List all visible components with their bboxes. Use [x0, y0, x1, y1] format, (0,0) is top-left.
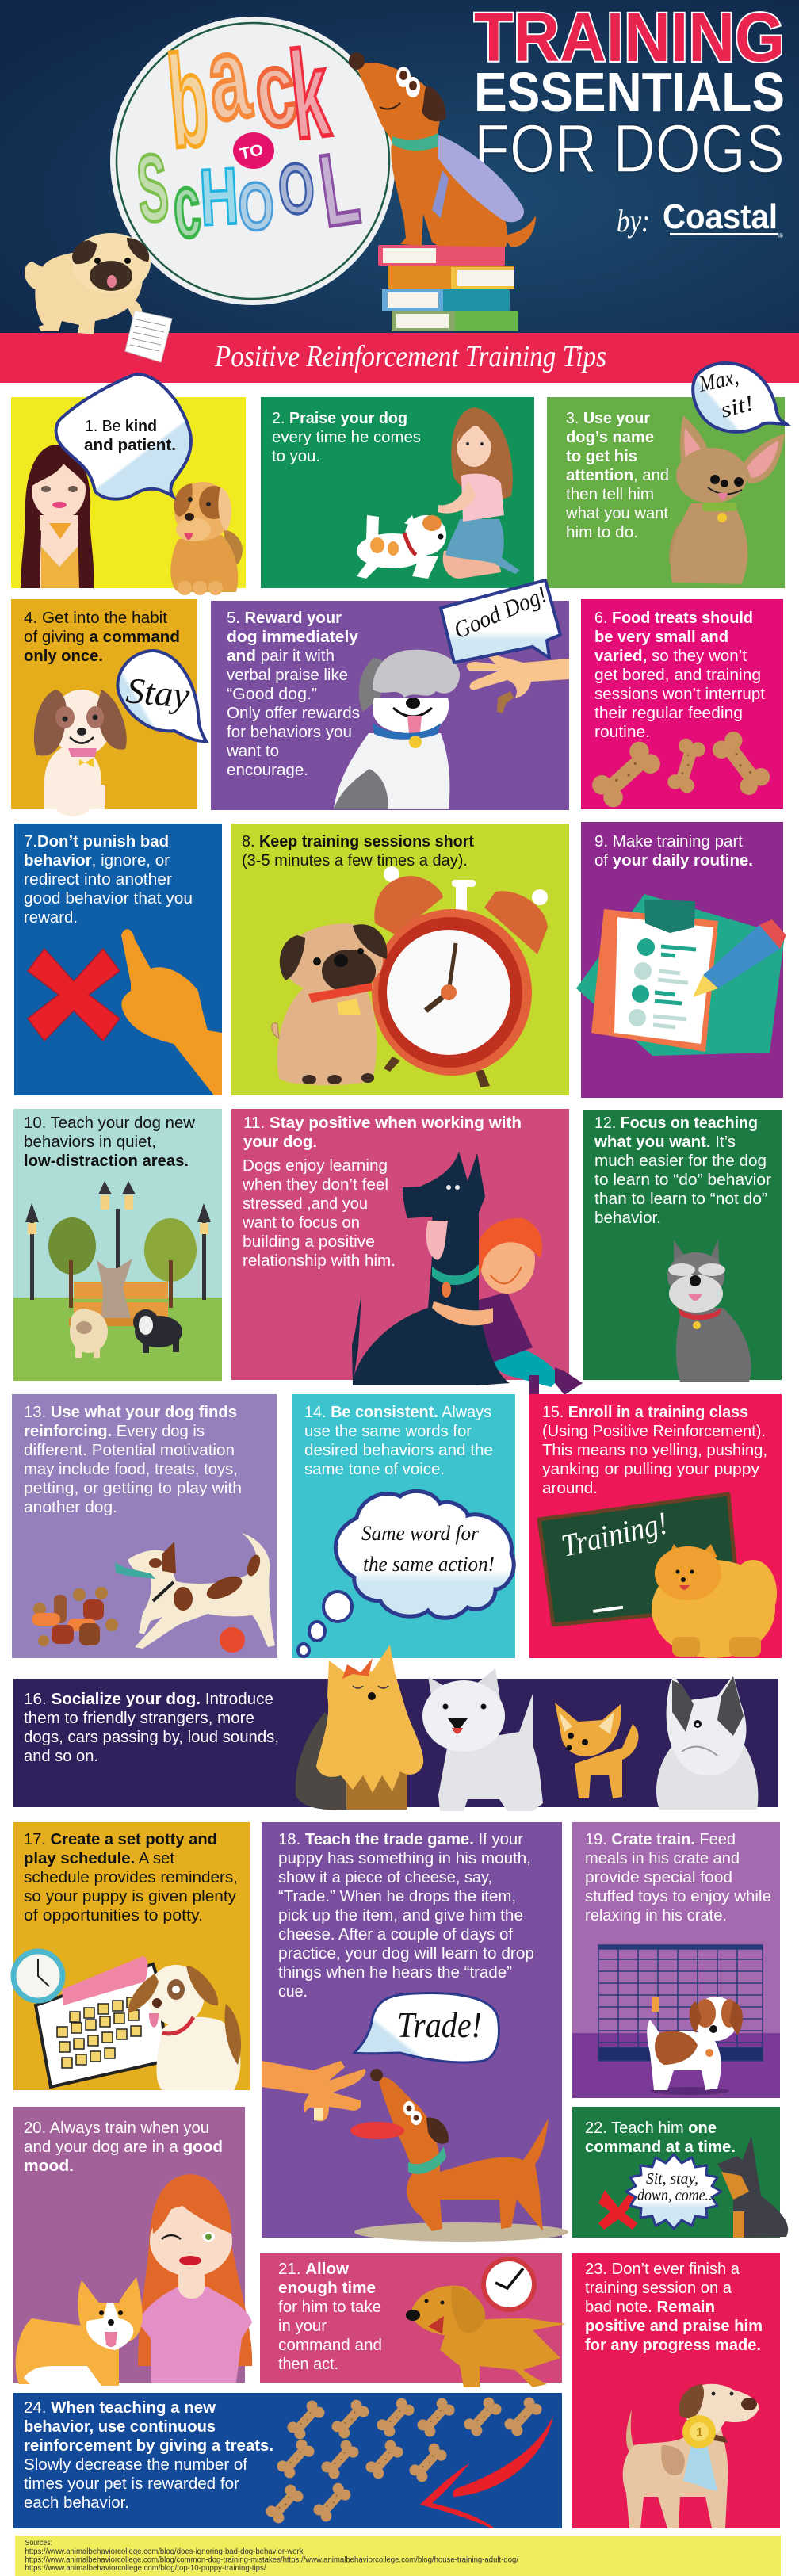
text: (3-5 minutes a few times a day). — [242, 852, 468, 869]
panel: tip 17 — [13, 1822, 250, 2090]
panel: tip 2 — [261, 397, 534, 588]
text — [24, 833, 193, 927]
panel: tip 3 — [547, 363, 786, 588]
starburst bubble — [626, 2154, 721, 2229]
speech bubble — [441, 580, 560, 663]
text: encourage. — [227, 762, 308, 779]
text: of giving a command — [24, 629, 180, 646]
starburst bubble: Sit, stay, — [646, 2170, 698, 2188]
icon: dog bones — [588, 728, 774, 811]
back to school badge: a — [199, 10, 257, 145]
text: 14. Be consistent. Always — [304, 1404, 491, 1421]
illustration: pug with paper — [25, 233, 172, 362]
illustration: girl — [21, 445, 94, 588]
text: times your pet is rewarded for — [24, 2475, 239, 2493]
text — [565, 410, 669, 541]
text: dog immediately — [227, 629, 359, 646]
text: 16. Socialize your dog. Introduce — [24, 1691, 273, 1708]
text: Slowly decrease the number of — [24, 2456, 247, 2474]
illustration: dog with medal — [623, 2384, 759, 2528]
illustration: great dane — [352, 1152, 510, 1385]
text: 13. Use what your dog finds — [24, 1404, 237, 1421]
text: and your dog are in a good — [24, 2138, 223, 2156]
text: This means no yelling, pushing, — [542, 1442, 767, 1459]
text: training session on a — [585, 2280, 732, 2297]
panel: tip 5 — [211, 580, 569, 810]
back to school badge: H — [197, 151, 241, 243]
text: around. — [542, 1480, 598, 1497]
text: to learn to “do” behavior — [594, 1171, 771, 1189]
text — [304, 1404, 493, 1478]
text: Only offer rewards — [227, 705, 360, 722]
illustration: schnauzer — [667, 1239, 751, 1382]
text: “Good dog.” — [227, 686, 317, 703]
sources: Sources: — [25, 2539, 52, 2547]
back to school badge: O — [275, 148, 318, 231]
text: 10. Teach your dog new — [24, 1114, 196, 1132]
text: practice, your dog will learn to drop — [278, 1945, 534, 1963]
text: relationship with him. — [243, 1252, 396, 1270]
illustration: hand with treat — [467, 651, 569, 713]
panel: tip 23 — [572, 2253, 780, 2528]
text: positive and praise him — [585, 2318, 763, 2335]
text — [594, 1114, 771, 1227]
icon: wall clock — [481, 2257, 537, 2312]
illustration: sheepdog — [334, 650, 460, 809]
illustration: westie — [422, 1668, 543, 1811]
text — [278, 2261, 382, 2373]
text: low-distraction areas. — [24, 1152, 189, 1170]
back to school badge: O — [236, 168, 276, 246]
text: petting, or getting to play with — [24, 1480, 242, 1497]
text: of your daily routine. — [594, 852, 753, 869]
text: behavior. — [594, 1210, 661, 1227]
text: attention, and — [566, 467, 669, 484]
panel: tip 1 — [11, 374, 246, 595]
header background — [0, 0, 799, 334]
text: cue. — [278, 1983, 308, 2001]
sources — [15, 2536, 781, 2576]
speech bubble — [56, 374, 191, 499]
illustration: dog with medal: 1 — [696, 2426, 703, 2440]
text: desired behaviors and the — [304, 1442, 493, 1459]
icon: red x — [28, 949, 120, 1041]
text: and patient. — [84, 437, 176, 454]
text: dogs, cars passing by, loud sounds, — [24, 1729, 279, 1746]
illustration: kibble — [32, 1587, 118, 1646]
back to school badge — [110, 10, 396, 305]
text — [272, 410, 421, 465]
illustration: puppy — [170, 482, 243, 595]
illustration: beagle puppy — [647, 1997, 743, 2095]
panel: tip 4 — [11, 599, 206, 816]
text: much easier for the dog — [594, 1152, 767, 1170]
illustration: hand with cheese — [262, 2061, 365, 2121]
text: when they don’t feel — [242, 1176, 388, 1194]
illustration: spaniel puppy — [34, 690, 127, 816]
text: enough time — [278, 2280, 376, 2297]
thought bubble: the same action! — [363, 1553, 495, 1576]
illustration: alarm clock — [372, 866, 548, 1087]
panel: tip 7 — [14, 824, 222, 1095]
illustration: clipboard and pencil — [576, 894, 786, 1056]
illustration: chalkboard: Training! — [558, 1504, 671, 1564]
text: of opportunities to potty. — [24, 1907, 203, 1924]
text — [24, 2399, 273, 2512]
text — [585, 2119, 736, 2156]
back to school badge: TO — [238, 141, 265, 163]
text: 6. Food treats should — [594, 610, 753, 627]
panel: tip 12 — [583, 1110, 782, 1382]
byline: Coastal: by: — [617, 203, 650, 239]
banner title: Positive Reinforcement Training Tips — [214, 340, 606, 373]
panel: tip 16 — [13, 1645, 778, 1811]
text: 12. Focus on teaching — [594, 1114, 758, 1132]
title — [474, 0, 785, 187]
thought bubble — [298, 1491, 514, 1657]
text: (Using Positive Reinforcement). — [542, 1423, 766, 1440]
text: want to — [226, 743, 279, 760]
text: bad note. Remain — [585, 2299, 715, 2316]
speech bubble — [693, 363, 786, 432]
text — [24, 1831, 238, 1924]
illustration: pug — [272, 923, 387, 1085]
text: dog’s name — [566, 429, 654, 446]
text: verbal praise like — [227, 667, 348, 684]
text: get bored, and training — [594, 667, 761, 684]
text: 23. Don’t ever finish a — [585, 2261, 740, 2278]
text: yanking or pulling your puppy — [542, 1461, 759, 1478]
text — [226, 610, 360, 779]
text: pick up the item, and give him the — [278, 1907, 523, 1924]
speech bubble: Trade! — [397, 2005, 482, 2045]
text: 8. Keep training sessions short — [242, 833, 474, 850]
text: 17. Create a set potty and — [24, 1831, 217, 1848]
text: behavior, use continuous — [24, 2418, 216, 2436]
text: what you want. It’s — [594, 1133, 736, 1151]
text: behavior, ignore, or — [24, 852, 170, 869]
byline: Coastal: ® — [778, 232, 783, 239]
text: different. Potential motivation — [24, 1442, 235, 1459]
illustration: boy — [474, 1218, 583, 1407]
text: “Trade.” When he drops the item, — [278, 1888, 516, 1905]
text: and so on. — [24, 1748, 98, 1765]
illustration: golden puppy — [406, 2286, 566, 2387]
text: and pair it with — [227, 648, 335, 665]
illustration: dog with toy and ball — [115, 1533, 275, 1653]
panel: tip 19 — [572, 1822, 780, 2098]
illustration: dog with frisbee — [350, 2069, 568, 2242]
illustration: puppy — [128, 1965, 241, 2090]
panel: tip 10 — [13, 1109, 222, 1381]
text: 15. Enroll in a training class — [542, 1404, 748, 1421]
text — [594, 833, 753, 869]
panel: tip 11 — [231, 1109, 583, 1407]
text: 1. Be kind — [85, 418, 157, 435]
panel: tip 13 — [12, 1394, 277, 1658]
text: 4. Get into the habit — [24, 610, 167, 627]
text: to get his — [566, 448, 637, 465]
illustration: woman — [138, 2174, 252, 2383]
text: use the same words for — [304, 1423, 472, 1440]
text — [24, 1691, 279, 1765]
text — [24, 2119, 223, 2175]
text: things when he hears the “trade” — [278, 1964, 512, 1982]
illustration: chalkboard — [539, 1494, 739, 1625]
text — [242, 833, 474, 869]
icon: rows of treats — [264, 2395, 544, 2525]
text: your dog. — [243, 1133, 317, 1151]
panel: tip 6 — [581, 599, 783, 811]
text: 21. Allow — [278, 2261, 349, 2278]
text — [242, 1114, 522, 1270]
panel: tip 20 — [13, 2107, 252, 2386]
text: reinforcing. Every dog is — [24, 1423, 205, 1440]
text: may include food, treats, toys, — [24, 1461, 238, 1478]
text: what you want — [565, 505, 668, 522]
text: command at a time. — [585, 2138, 736, 2156]
illustration: girl kneeling — [438, 407, 520, 579]
text: schedule provides reminders, — [24, 1869, 238, 1886]
text: command and — [278, 2337, 382, 2354]
illustration: pomeranian — [652, 1544, 777, 1658]
byline: Coastal — [617, 197, 783, 239]
text: them to friendly strangers, more — [24, 1710, 254, 1727]
back to school badge: L — [313, 130, 365, 249]
illustration: running puppy — [357, 515, 446, 579]
illustration: doberman — [717, 2136, 788, 2238]
illustration: yorkie — [296, 1645, 423, 1810]
speech bubble: Max, — [696, 365, 740, 397]
text: meals in his crate and — [585, 1850, 740, 1867]
speech bubble: sit! — [718, 391, 756, 423]
text: for behaviors you — [227, 724, 352, 741]
text — [585, 1831, 771, 1924]
text: stuffed toys to enjoy while — [585, 1888, 771, 1905]
text — [594, 610, 765, 741]
text: in your — [278, 2318, 327, 2335]
panel: tip 9 — [576, 822, 786, 1098]
text — [24, 610, 180, 665]
back to school badge: S — [133, 134, 172, 242]
text — [84, 418, 176, 454]
text: only once. — [24, 648, 103, 665]
illustration: french bulldog — [656, 1675, 758, 1810]
text: each behavior. — [24, 2494, 129, 2512]
text: him to do. — [566, 524, 638, 541]
sources: https://www.animalbehaviorcollege.com/blog/top-10-puppy-training-tips/ — [25, 2564, 266, 2573]
text: 5. Reward your — [227, 610, 342, 627]
speech bubble: Stay — [124, 670, 192, 716]
text: every time he comes — [272, 429, 421, 446]
arrow — [420, 2415, 553, 2528]
text: provide special food — [585, 1869, 732, 1886]
illustration: chihuahua — [555, 1703, 639, 1798]
text: 3. Use your — [566, 410, 650, 427]
illustration: crate — [598, 1945, 763, 2061]
text: 18. Teach the trade game. If your — [278, 1831, 523, 1848]
sources: https://www.animalbehaviorcollege.com/blog/common-dog-training-mistakes/https://www.animalbehaviorcollege.com/blog/house-training-adult-dog/ — [25, 2555, 518, 2565]
back to school badge: c — [245, 26, 305, 152]
text: for any progress made. — [585, 2337, 761, 2354]
text — [585, 2261, 763, 2354]
back to school badge: k — [284, 23, 335, 166]
text: varied, so they won’t — [594, 648, 747, 665]
text: mood. — [24, 2157, 74, 2175]
banner — [0, 333, 799, 383]
thought bubble: Same word for — [361, 1522, 480, 1545]
panel: tip 15 — [529, 1394, 782, 1658]
speech bubble — [117, 651, 206, 741]
text: same tone of voice. — [304, 1461, 445, 1478]
text: their regular feeding — [594, 705, 743, 722]
illustration: corgi — [16, 2277, 143, 2386]
panel: tip 21 — [260, 2253, 566, 2387]
text: play schedule. A set — [24, 1850, 174, 1867]
starburst bubble: down, come... — [637, 2187, 716, 2204]
text: 2. Praise your dog — [272, 410, 407, 427]
text: 20. Always train when you — [24, 2119, 209, 2137]
illustration: calendar and clock — [13, 1951, 166, 2087]
text: building a positive — [243, 1233, 375, 1251]
text: 22. Teach him one — [585, 2119, 717, 2137]
text — [542, 1404, 767, 1497]
text: another dog. — [24, 1499, 117, 1516]
text: routine. — [594, 724, 650, 741]
text: 24. When teaching a new — [24, 2399, 216, 2417]
text: 7.Don’t punish bad — [24, 833, 169, 850]
text: be very small and — [594, 629, 728, 646]
text: to you. — [272, 448, 320, 465]
text: reward. — [24, 909, 78, 927]
text — [24, 1404, 242, 1516]
text: reinforcement by giving a treats. — [24, 2437, 273, 2455]
text: than to learn to “not do” — [594, 1191, 767, 1208]
text: 19. Crate train. Feed — [585, 1831, 736, 1848]
illustration: dog with backpack — [349, 52, 536, 247]
text: puppy has something in his mouth, — [278, 1850, 531, 1867]
text: stressed ,and you — [243, 1195, 368, 1213]
speech bubble — [354, 1993, 499, 2062]
back to school badge: b — [162, 28, 214, 175]
panel: tip 18 — [262, 1822, 568, 2242]
text: 9. Make training part — [594, 833, 743, 850]
text — [24, 1114, 196, 1170]
panel: tip 22 — [572, 2107, 788, 2238]
panel: tip 24 — [13, 2393, 562, 2528]
text: redirect into another — [24, 871, 172, 889]
text: relaxing in his crate. — [585, 1907, 727, 1924]
text: behaviors in quiet, — [24, 1133, 156, 1151]
speech bubble: Good Dog! — [450, 582, 551, 644]
icon: red x — [598, 2190, 637, 2230]
panel: tip 8 — [231, 824, 569, 1095]
back to school badge: c — [169, 155, 205, 258]
icon: stack of books — [378, 245, 518, 331]
text: then tell him — [566, 486, 654, 503]
text: 11. Stay positive when working with — [243, 1114, 522, 1132]
text: then act. — [278, 2356, 338, 2373]
sources: https://www.animalbehaviorcollege.com/blog/does-ignoring-bad-dog-behavior-work — [25, 2547, 304, 2556]
text: so your puppy is given plenty — [24, 1888, 236, 1905]
icon: pointing hand — [121, 929, 222, 1095]
text: want to focus on — [242, 1214, 360, 1232]
panel: tip 14 — [292, 1394, 515, 1658]
byline: Coastal: Coastal — [663, 197, 778, 236]
text: good behavior that you — [24, 890, 193, 908]
text: cheese. After a couple of days of — [278, 1926, 513, 1943]
text: for him to take — [278, 2299, 381, 2316]
illustration: park with dogs — [25, 1181, 211, 1358]
text: sessions won’t interrupt — [594, 686, 765, 703]
text: Dogs enjoy learning — [243, 1157, 388, 1175]
text: show it a piece of cheese, say, — [278, 1869, 492, 1886]
illustration: chihuahua — [669, 415, 785, 584]
text — [278, 1831, 534, 2001]
